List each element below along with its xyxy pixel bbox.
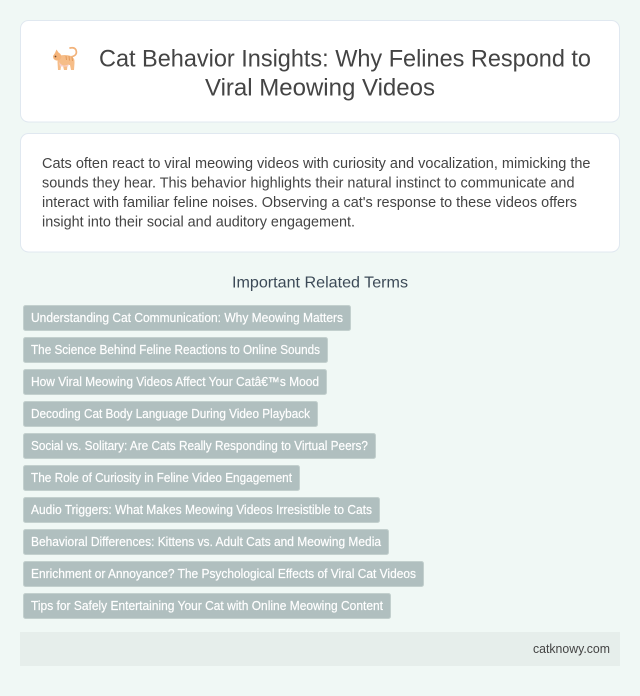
footer (20, 632, 620, 666)
description text: interact with familiar feline noises. Observing a cat's response to these videos offers (42, 195, 577, 211)
icon: cat (53, 48, 76, 70)
title text: Viral Meowing Videos (205, 74, 435, 102)
description text (42, 156, 590, 230)
footer: catknowy.com (533, 641, 610, 656)
title text (99, 46, 591, 102)
tag 9: Enrichment or Annoyance? The Psychological Effects of Viral Cat Videos (31, 567, 416, 581)
tag 3: How Viral Meowing Videos Affect Your Catâ€™s Mood (31, 375, 319, 389)
tag 9 (24, 562, 424, 586)
tag 1 (24, 306, 350, 330)
description text: Cats often react to viral meowing videos with curiosity and vocalization, mimicking the (42, 156, 590, 172)
heading: related terms: Important Related Terms (232, 274, 408, 292)
tag 4 (24, 402, 318, 426)
tag 2 (24, 338, 328, 362)
tag 5 (24, 434, 376, 458)
tag 3 (24, 370, 326, 394)
tag 8: Behavioral Differences: Kittens vs. Adult Cats and Meowing Media (31, 535, 381, 549)
tag 5: Social vs. Solitary: Are Cats Really Responding to Virtual Peers? (31, 439, 368, 453)
panel: title card (20, 20, 620, 122)
title text: Cat Behavior Insights: Why Felines Respond to (99, 46, 591, 72)
panel: description (20, 134, 620, 252)
description text: insight into their social and auditory engagement. (42, 214, 355, 230)
tag 1: Understanding Cat Communication: Why Meowing Matters (31, 311, 343, 325)
list: related term tags (24, 306, 424, 618)
description text: sounds they hear. This behavior highlights their natural instinct to communicate and (42, 176, 574, 192)
tag 10: Tips for Safely Entertaining Your Cat with Online Meowing Content (31, 599, 383, 613)
tag 6 (24, 466, 300, 490)
tag 7: Audio Triggers: What Makes Meowing Videos Irresistible to Cats (31, 503, 372, 517)
tag 8 (24, 530, 388, 554)
tag 10 (24, 594, 390, 618)
tag 4: Decoding Cat Body Language During Video Playback (31, 407, 311, 421)
tag 6: The Role of Curiosity in Feline Video Engagement (31, 471, 292, 485)
tag 2: The Science Behind Feline Reactions to Online Sounds (31, 343, 320, 357)
tag 7 (24, 498, 380, 522)
